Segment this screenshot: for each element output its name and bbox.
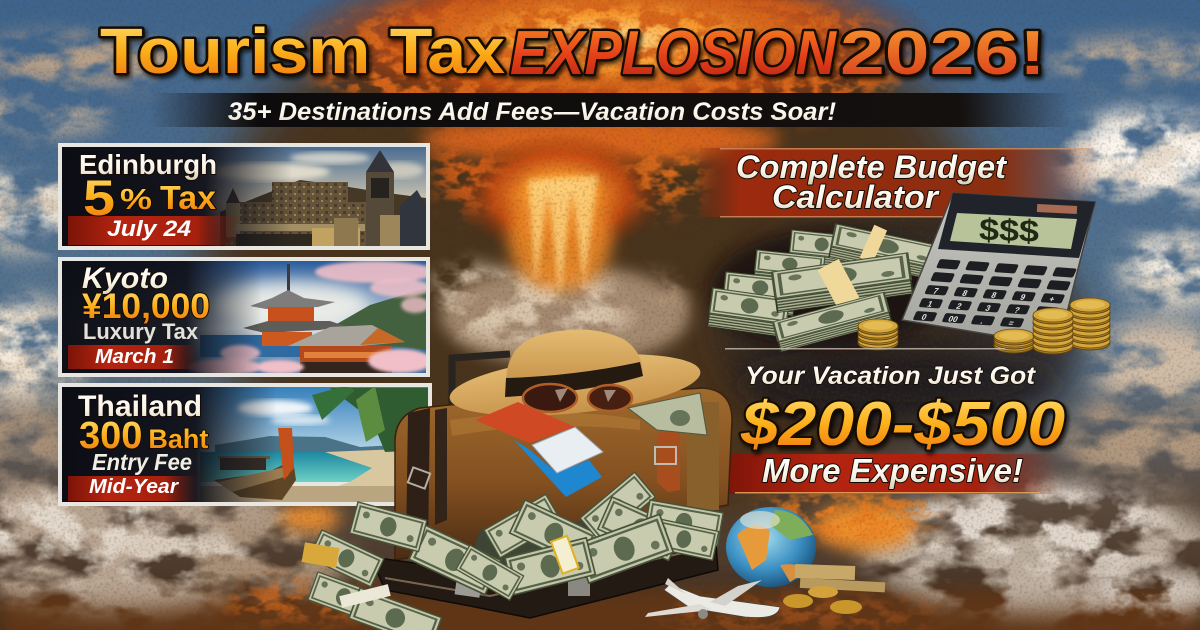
fee type: Luxury Tax: Luxury Tax [83,319,199,344]
city name: Edinburgh: Edinburgh [79,149,217,180]
background: explosion fire [280,0,940,551]
calculator display: $$$: $$$ [978,212,1040,249]
fee value: 300 Baht: 300Baht [79,415,208,457]
illustration: suitcase [371,354,732,618]
illustration: sunglasses [523,384,632,412]
heading banner: Complete Budget Calculator [700,148,1100,218]
callout amount: $200-$500 [740,390,1065,459]
background: right column dark smoke [715,210,1085,440]
illustration: passport and tickets [475,402,603,497]
callout line 3: More Expensive! [762,452,1023,489]
heading banner: Complete Budget Calculator: Complete Budget [736,149,1007,185]
title: EXPLOSION: EXPLOSION [510,19,837,88]
country name: Thailand: Thailand [78,390,202,423]
date: March 1: March 1 [95,346,174,368]
callout line 1: Your Vacation Just Got [745,362,1037,390]
calculator keypad: 1 [926,299,935,309]
illustration: calculator [902,193,1095,340]
date band: July 24 [68,216,240,245]
panel: Thailand [58,383,432,506]
panel: Kyoto [58,257,435,377]
fee type: Entry Fee: Entry Fee [92,449,192,475]
photo: Kyoto pagoda and cherry blossoms [62,261,435,375]
callout band [722,454,1062,494]
callout: Your Vacation Just Got $200-$500 More Expensive! [722,348,1065,494]
calculator keypad: 00 [947,314,960,324]
calculator keypad: 0 [920,312,929,322]
date band: March 1 [68,345,198,369]
calculator keypad: 8 [961,288,970,298]
illustration: cash in suitcase [302,472,723,600]
calculator screen [950,213,1077,249]
background: bright cloud highlights [0,114,1200,614]
heading banner: Complete Budget Calculator: Calculator [772,179,940,215]
suitcase handle [452,354,510,412]
calculator keypad: = [1007,318,1016,328]
illustration: bills under hat [628,393,707,435]
illustration: coin stacks [858,298,1110,354]
date: Mid-Year: Mid-Year [89,476,179,498]
date: July 24: July 24 [107,216,191,241]
photo: Thailand beach and longtail boat [62,386,428,502]
illustration: cash bundle front [308,572,442,630]
background: rusty ember texture [220,0,940,627]
calculator keypad: 7 [932,286,941,296]
illustration: money stacks [708,224,942,352]
calculator keypad: 9 [1019,292,1028,302]
calculator keypad [912,259,1077,330]
subtitle banner: 35+ Destinations Add Fees—Vacation Costs Soar! [228,98,836,126]
suitcase lower shell [371,530,718,618]
date band: Mid-Year [68,476,198,501]
fee value: ¥10,000: ¥10,000 [82,287,210,326]
city name: Kyoto: Kyoto [82,262,168,295]
tax value: 5% Tax: Tax [160,179,217,216]
photo: Edinburgh skyline [206,147,426,246]
title: 2026!: 2026! [840,19,1046,88]
title [100,15,1046,88]
calculator keypad: 8 [990,290,999,300]
tax value: 5% Tax: % [120,184,152,216]
suitcase buckle strap [655,431,680,492]
calculator keypad: 3 [984,303,993,313]
calculator keypad: − [1042,307,1051,317]
illustration: globe [726,507,816,587]
suitcase body [395,388,732,560]
calculator keypad: 2 [955,301,964,311]
illustration: coins and bills beside globe [783,564,885,614]
subtitle banner [150,93,1070,127]
calculator keypad: + [1048,294,1057,304]
tax value: 5% Tax [83,170,217,226]
title: Tourism Tax: Tourism Tax [100,15,505,87]
panel: Edinburgh [58,143,430,250]
calculator keypad: ? [1013,305,1022,315]
suitcase straps [406,408,447,548]
illustration: straw hat [447,330,703,426]
illustration: airplane [645,578,780,619]
tax value: 5% Tax: 5 [83,170,115,226]
calculator keypad: . [979,316,986,326]
